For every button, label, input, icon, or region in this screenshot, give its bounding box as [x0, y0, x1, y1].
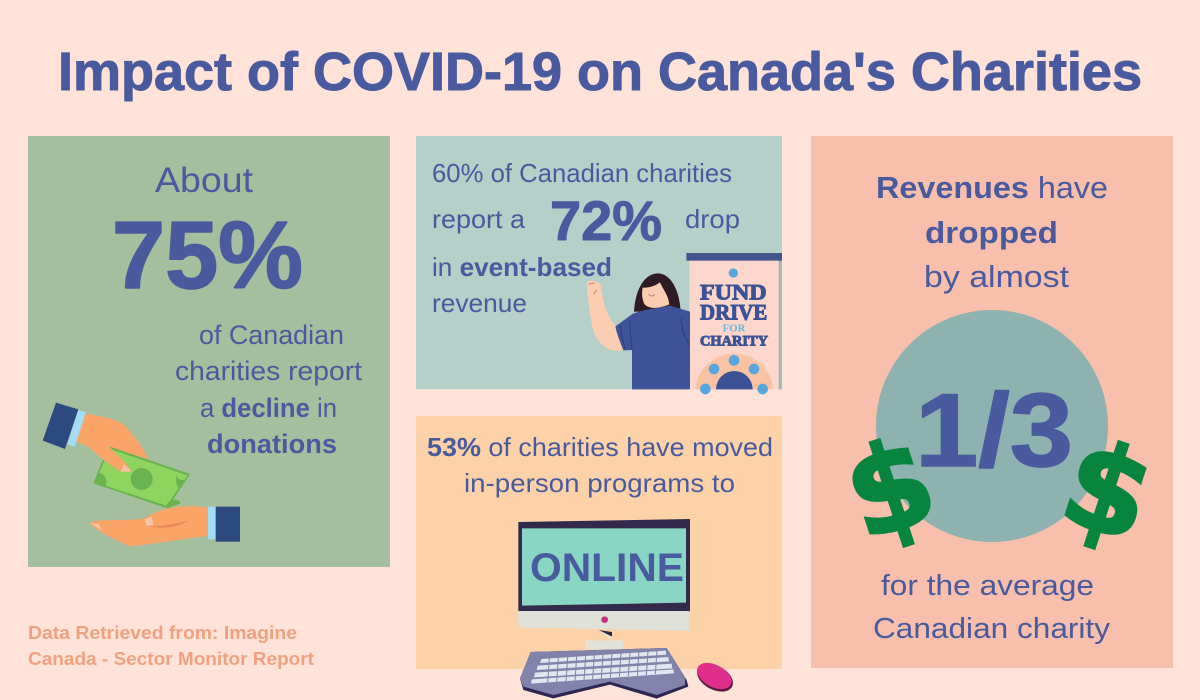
- text block: decline in donations: donations: [207, 429, 337, 459]
- text block: moved online: 53% of charities have moved: [427, 432, 773, 462]
- circle: [876, 310, 1108, 542]
- woman: [587, 273, 690, 389]
- panel: revenue drop: [811, 136, 1173, 668]
- text block: decline in donations: of Canadian: [199, 320, 344, 350]
- icon: right dollar sign: $: [1046, 412, 1169, 570]
- text block: revenues dropped: dropped: [925, 215, 1058, 250]
- big statistic: 75%: 75%: [112, 202, 303, 309]
- panel: online programs: [416, 416, 782, 699]
- text block: moved online: [427, 432, 773, 498]
- text block: revenues dropped: [876, 170, 1108, 294]
- poster: FUND: [700, 280, 767, 305]
- text block: average charity: for the average: [881, 570, 1094, 602]
- poster: DRIVE: [700, 300, 767, 325]
- big statistic: 72%: 72%: [550, 189, 662, 252]
- text block: moved online: in-person programs to: [464, 468, 735, 498]
- text block: event revenue: drop: [685, 204, 740, 234]
- intro text: about: About: [155, 161, 253, 200]
- icon: hands exchanging money: [43, 403, 240, 547]
- text block: event revenue: [432, 158, 740, 318]
- big statistic: one third: 1/3: [915, 373, 1073, 489]
- text block: event revenue: in event-based: [432, 252, 612, 282]
- text block: decline in donations: charities report: [175, 356, 363, 386]
- text block: decline in donations: [175, 320, 363, 459]
- icon: desktop computer: [518, 519, 738, 699]
- text block: revenues dropped: by almost: [924, 259, 1069, 294]
- illustration: woman with fund drive poster: [587, 253, 782, 394]
- title: Impact of COVID-19 on Canada's Charities: [58, 42, 1142, 102]
- source note: Canada - Sector Monitor Report: [28, 649, 314, 669]
- text block: average charity: [873, 570, 1111, 645]
- panel: event-based revenue: [416, 136, 782, 394]
- text block: event revenue: 60% of Canadian charities: [432, 158, 732, 188]
- text block: revenues dropped: Revenues have: [876, 170, 1108, 205]
- poster: [686, 253, 782, 394]
- screen label: online: ONLINE: [530, 546, 684, 590]
- panel: donations decline: [28, 136, 390, 567]
- icon: left dollar sign: $: [829, 410, 952, 568]
- source note: Data Retrieved from: Imagine: [28, 623, 297, 643]
- text block: event revenue: revenue: [432, 288, 527, 318]
- poster: FOR: [723, 324, 746, 335]
- poster: CHARITY: [700, 334, 768, 350]
- text block: average charity: Canadian charity: [873, 613, 1111, 645]
- text block: event revenue: report a: [432, 204, 526, 234]
- source note: [28, 623, 314, 669]
- text block: decline in donations: a decline in: [200, 393, 337, 423]
